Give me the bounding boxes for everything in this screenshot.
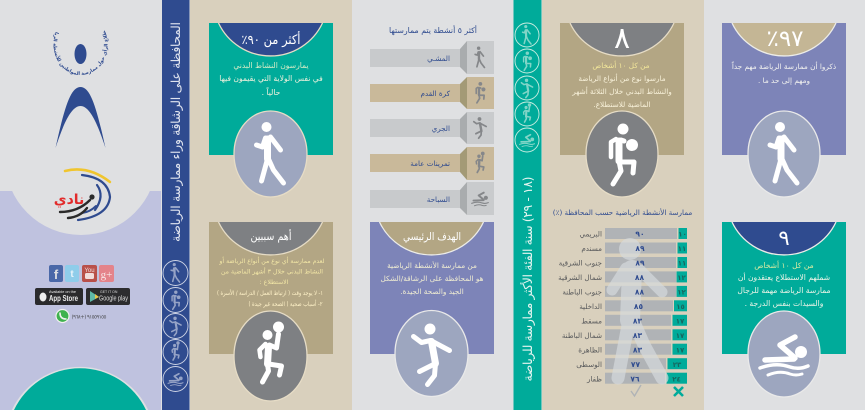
whatsapp contact xyxy=(56,310,107,322)
list: swimming xyxy=(370,182,494,215)
strip title: المحافظة على الرشاقة وراء ممارسة الرياضة xyxy=(168,22,184,242)
governorate labels: مسقط xyxy=(581,316,602,326)
negative values: ١١ xyxy=(678,260,686,268)
list: general exercise: تمرينات عامة xyxy=(410,159,450,168)
social icons: g+ xyxy=(101,269,112,281)
button: App Store: Available on the xyxy=(49,290,76,294)
governorate labels: شمال الشرقية xyxy=(558,273,602,282)
card: 97 percent: ومهم إلى حد ما . xyxy=(758,76,810,85)
logo: survey emblem xyxy=(53,30,108,148)
card: two main reasons: النشاط البدني خلال ٣ أشهر الماضية من xyxy=(221,266,323,276)
card: more than 90 percent xyxy=(209,23,333,197)
heading: top five activities: أكثر ٥ أنشطة يتم ممارستها xyxy=(389,25,477,35)
list: walking xyxy=(370,41,494,74)
positive values: ٨٩ xyxy=(635,258,645,268)
chart bars xyxy=(605,228,687,384)
negative values: ١٧ xyxy=(676,332,685,340)
card: more than 90 percent: حالياً . xyxy=(262,86,281,97)
positive values xyxy=(630,230,645,384)
button: App Store: App Store xyxy=(49,294,78,303)
teal circle xyxy=(12,367,148,410)
card: 97 percent: ذكروا أن ممارسة الرياضة مهم جداً xyxy=(731,60,836,71)
card: 8 of 10: مارسوا نوع من أنواع الرياضة xyxy=(578,73,666,83)
list: swimming: السباحة xyxy=(427,195,450,204)
chart: activity by governorate xyxy=(553,208,692,396)
governorate labels: الداخلية xyxy=(579,302,602,311)
icon: check mark xyxy=(631,385,641,396)
governorate labels: الظاهرة xyxy=(578,346,602,354)
list: football: كرة القدم xyxy=(421,89,451,98)
negative values: ٢٣ xyxy=(673,361,682,369)
grey circle with logos xyxy=(5,83,157,235)
card: main goal: الهدف الرئيسي xyxy=(403,231,461,243)
governorate labels: شمال الباطنة xyxy=(562,331,602,340)
card: two main reasons xyxy=(209,222,333,401)
governorate labels: جنوب الباطنة xyxy=(562,288,602,296)
background: left panel xyxy=(0,0,161,410)
card: more than 90 percent: يمارسون النشاط البدني xyxy=(233,61,309,70)
governorate labels: ظفار xyxy=(586,374,602,384)
positive values: ٨٣ xyxy=(633,331,642,340)
negative values: ١٠ xyxy=(678,230,687,238)
card: main goal: الجيد والصحة الجيدة. xyxy=(400,287,464,296)
strip icons xyxy=(163,260,188,392)
list: running xyxy=(370,112,494,144)
panel: blue side strip xyxy=(162,0,190,410)
card: 9 of 10: ٩ xyxy=(778,226,790,250)
card: 9 of 10 xyxy=(722,222,846,397)
negative values: ١٧ xyxy=(676,318,685,326)
social icons: You xyxy=(84,268,95,274)
list: walking: المشـي xyxy=(427,54,450,63)
negative values: ١١ xyxy=(678,245,686,253)
strip title: (١٨ - ٢٩) سنة الفئة الأكثر ممارسة للرياضة xyxy=(520,176,536,382)
negative values: ١٥ xyxy=(676,303,685,311)
list: general exercise xyxy=(370,147,494,180)
card: 9 of 10: ممارسة الرياضة مهمة للرجال xyxy=(737,286,831,295)
logo: Nadi: نادي xyxy=(54,192,84,209)
negative values: ٢٤ xyxy=(672,376,681,384)
button: App Store xyxy=(35,288,83,305)
social icons: f xyxy=(54,267,59,282)
card: 9 of 10: من كل ١٠ أشخاص xyxy=(754,260,814,270)
card: two main reasons: الاستطلاع : xyxy=(260,279,289,286)
button: Google Play xyxy=(86,288,130,305)
chart heading: ممارسة الأنشطة الرياضية حسب المحافظة (٪) xyxy=(553,208,692,217)
panel: back cover xyxy=(0,0,161,410)
governorate labels: مسندم xyxy=(581,244,602,253)
card: two main reasons: لعدم ممارسة أي نوع من أنواع الرياضة أو xyxy=(218,256,325,265)
card: 97 percent: ٩٧٪ xyxy=(766,26,804,52)
positive values: ٩٠ xyxy=(635,230,645,238)
governorate labels: البريمي xyxy=(580,230,602,238)
card: main goal xyxy=(370,222,494,396)
button: Google Play: GET IT ON xyxy=(100,290,118,294)
negative values xyxy=(672,230,687,384)
positive values: ٨٨ xyxy=(635,273,644,282)
negative values: ١٢ xyxy=(677,288,686,296)
governorate labels: الوسطى xyxy=(576,360,602,369)
negative values: ١٢ xyxy=(677,274,686,282)
card: 8 of 10 xyxy=(560,21,684,197)
positive values: ٧٧ xyxy=(631,360,640,369)
governorate labels: جنوب الشرقية xyxy=(559,258,602,268)
background: grey column four xyxy=(704,0,865,410)
card: more than 90 percent: في نفس الولاية التي يقيمون فيها xyxy=(219,74,323,83)
negative values: ١٧ xyxy=(676,346,685,354)
positive values: ٨٩ xyxy=(635,244,645,253)
card: main goal: من ممارسة الأنشطة الرياضية xyxy=(387,261,477,270)
background: tan column one xyxy=(190,0,352,410)
card: 8 of 10: الماضية للاستطلاع. xyxy=(593,100,651,109)
card: 8 of 10: والنشاط البدني خلال الثلاثة أشهر xyxy=(571,86,672,96)
whatsapp contact: (٩٦٨+) ٩١٥٥٩١٥٥ xyxy=(72,314,107,320)
positive values: ٨٣ xyxy=(633,346,642,354)
card: two main reasons: ١- لا يوجد وقت ( ارتباط العمل / الدراسة / الأسرة ) xyxy=(217,289,323,297)
card: main goal: هو المحافظة على الرشاقة/الشكل xyxy=(380,274,484,283)
card: more than 90 percent: أكثر من ٩٠٪ xyxy=(242,31,300,48)
list: running: الجري xyxy=(432,124,450,133)
card: two main reasons: ٢- أسباب صحية ( الصحة غير جيدة ) xyxy=(249,299,323,308)
card: two main reasons: أهم سببين xyxy=(250,229,292,243)
watermark figure xyxy=(612,238,662,378)
panel: teal side strip xyxy=(514,0,542,410)
positive values: ٧٦ xyxy=(630,374,640,384)
positive values: ٨٨ xyxy=(635,288,644,296)
strip icons xyxy=(515,23,539,152)
social icons: t xyxy=(70,269,74,280)
card: 9 of 10: شملهم الاستطلاع يعتقدون أن xyxy=(738,272,830,282)
social icons xyxy=(49,265,114,282)
positive values: ٨٣ xyxy=(633,316,642,326)
background: tan column three xyxy=(542,0,704,410)
background: grey column two xyxy=(352,0,513,410)
button: Google Play: Google play xyxy=(99,296,128,302)
positive values: ٨٥ xyxy=(634,302,643,311)
card: 97 percent xyxy=(722,23,846,197)
list: football xyxy=(370,77,494,109)
card: 8 of 10: من كل ١٠ أشخاص xyxy=(592,60,650,70)
icon: cross mark xyxy=(674,387,683,396)
logo: Nadi xyxy=(54,169,110,220)
governorate labels xyxy=(558,230,602,384)
card: 9 of 10: والسيدات بنفس الدرجة . xyxy=(745,299,824,308)
card: 8 of 10: ٨ xyxy=(614,21,630,56)
